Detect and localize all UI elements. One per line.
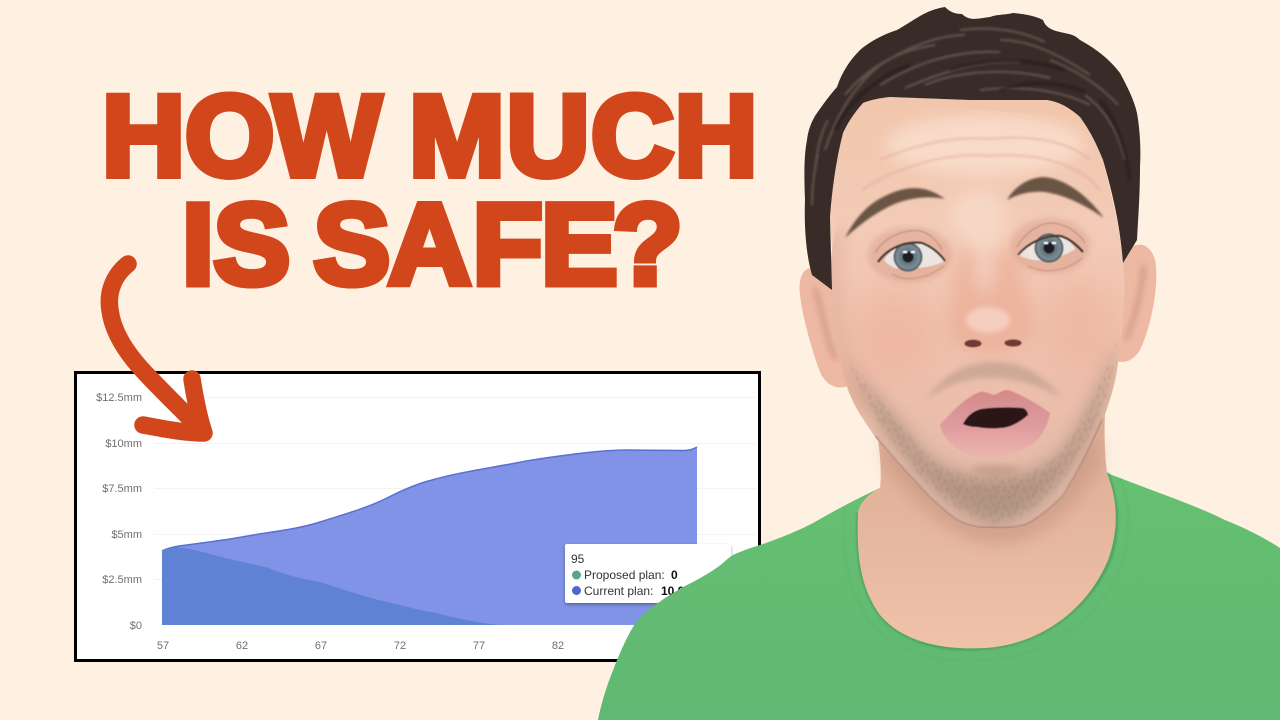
neck shadow under chin: [885, 430, 1100, 545]
gridlines and y axis labels: $7.5mm: [102, 483, 142, 495]
nose: [947, 230, 1035, 354]
x axis labels: 77: [473, 640, 485, 652]
chart tooltip: 0: [671, 568, 678, 582]
chart tooltip: [565, 544, 731, 603]
x axis labels: 67: [315, 640, 327, 652]
cheek warmth right: [1050, 286, 1109, 359]
chart tooltip: Proposed plan:: [584, 568, 665, 582]
neck: [858, 400, 1116, 648]
face side shade left: [833, 230, 860, 410]
forehead highlight: [885, 115, 1085, 175]
chart frame: [76, 372, 760, 660]
moustache stubble: [925, 362, 1062, 400]
gridlines and y axis labels: $10mm: [105, 438, 142, 450]
brow bridge highlight: [951, 190, 1004, 236]
left eyebrow: [845, 188, 945, 238]
shirt collar rib: [844, 478, 1129, 661]
person: [598, 7, 1280, 720]
x axis labels: [157, 640, 564, 652]
chart tooltip: Current plan:: [584, 584, 653, 598]
lips: [940, 390, 1050, 457]
x axis labels: 62: [236, 640, 248, 652]
title: HOW MUCH IS SAFE?: [102, 72, 758, 309]
mouth opening: [963, 407, 1028, 428]
area: current plan: [162, 447, 697, 625]
current plan top line: [162, 447, 697, 551]
right eyebrow: [1007, 177, 1104, 218]
x axis labels: 82: [552, 640, 564, 652]
right eye: [1017, 223, 1085, 271]
gridlines and y axis labels: $5mm: [111, 529, 142, 541]
stubble base: [848, 340, 1118, 524]
x axis labels: 72: [394, 640, 406, 652]
hair strands light: [812, 28, 1125, 205]
gridlines and y axis labels: $12.5mm: [96, 392, 142, 404]
stubble hair texture: [848, 340, 1118, 524]
right ear inner shade: [1126, 265, 1144, 340]
green t-shirt: [598, 473, 1280, 720]
gridlines and y axis labels: $2.5mm: [102, 574, 142, 586]
chart tooltip: 95: [571, 552, 585, 566]
gridlines and y axis labels: $0: [130, 620, 142, 632]
mouth: [940, 390, 1050, 457]
left eye: [875, 231, 945, 279]
face: [830, 97, 1124, 528]
right ear: [1114, 245, 1156, 362]
panel: retirement projection chart: [76, 372, 760, 660]
forehead wrinkles: [862, 138, 1100, 190]
hair strands dark: [835, 61, 1130, 180]
title line 2: IS SAFE?: [182, 181, 683, 309]
left ear inner shade: [815, 288, 836, 360]
face shading: [833, 115, 1118, 528]
gridlines and y axis labels: [96, 392, 756, 632]
shirt collar shading: [858, 473, 1116, 649]
nostrils: [964, 340, 982, 347]
soul patch: [970, 465, 1020, 476]
chart tooltip: 10.0: [661, 584, 685, 598]
x axis labels: 57: [157, 640, 169, 652]
arrow pointing to chart: [109, 264, 204, 433]
hair: [804, 7, 1140, 290]
area: proposed plan: [162, 548, 499, 625]
left ear: [800, 268, 850, 387]
jaw edge: [875, 420, 1103, 528]
title line 1: HOW MUCH: [102, 72, 758, 200]
cheek warmth left: [860, 296, 929, 370]
eye sockets shadow: [868, 218, 1090, 283]
